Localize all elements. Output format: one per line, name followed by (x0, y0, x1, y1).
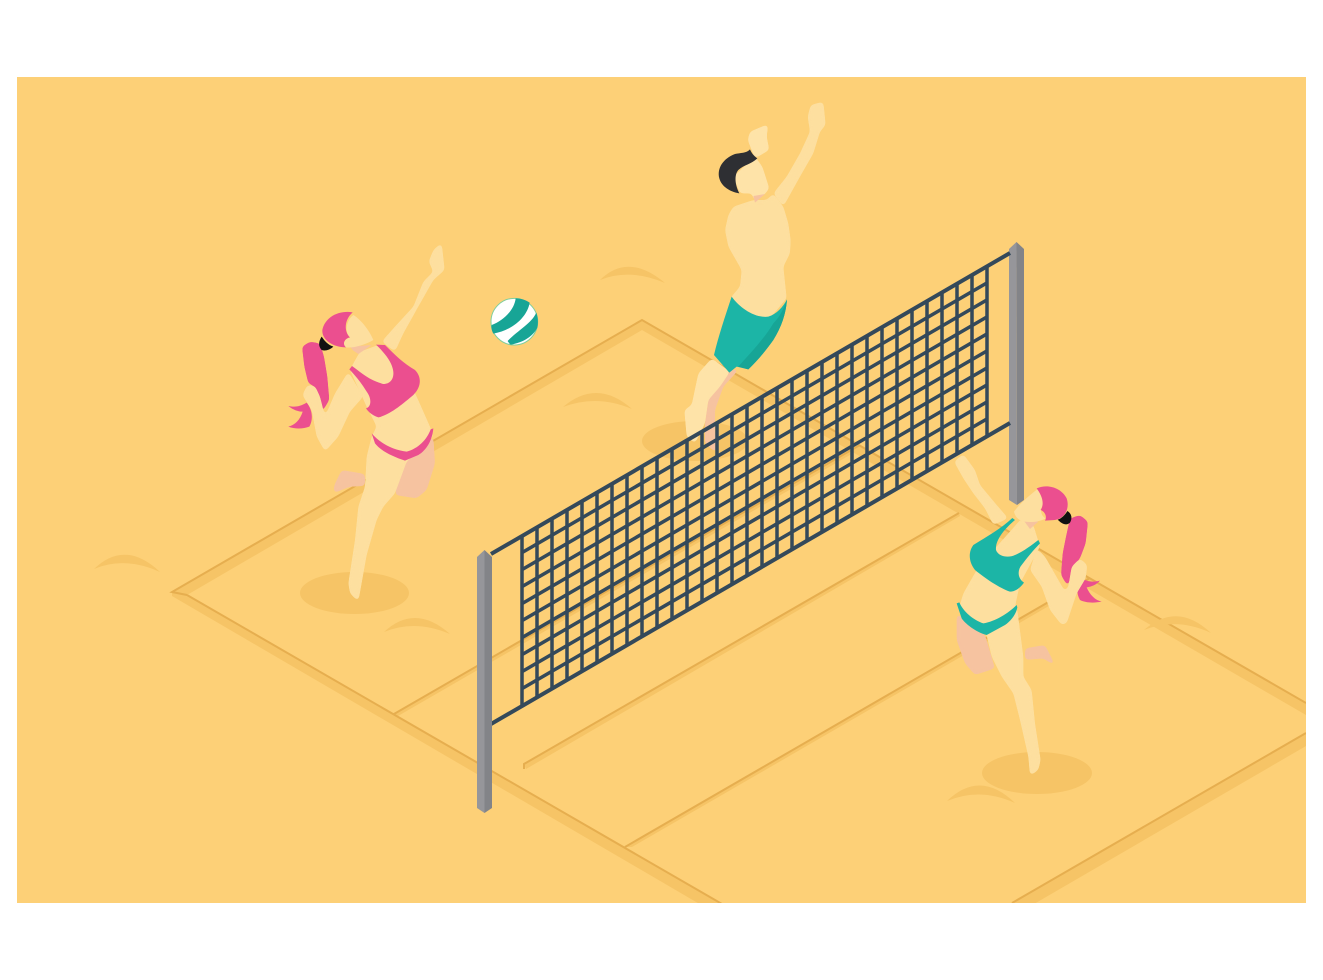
ponytail (302, 342, 329, 413)
left net post (477, 550, 492, 813)
volleyball net (491, 253, 1010, 724)
court line shadows (172, 320, 1306, 906)
hair cap (1037, 486, 1068, 521)
hair (719, 149, 757, 193)
ball stripes (491, 298, 538, 345)
face (344, 315, 373, 348)
ponytail tip (288, 403, 312, 429)
player: left woman in pink (288, 243, 445, 602)
mound (600, 267, 665, 283)
bikini bottom (372, 428, 433, 461)
bikini bottom (957, 602, 1017, 635)
shadow: left player (300, 572, 409, 614)
mound (563, 393, 632, 409)
shorts shade (738, 299, 787, 369)
raised arm (954, 454, 1008, 525)
front leg (684, 358, 730, 443)
sand mounds (94, 267, 1211, 803)
torso (725, 193, 791, 320)
player: right woman in teal (954, 454, 1102, 776)
net mesh verticals (522, 266, 987, 706)
net cords (491, 253, 1010, 724)
neck (1023, 520, 1038, 529)
ponytail (1061, 515, 1088, 587)
bent arm (1030, 548, 1087, 625)
raised arm (382, 243, 445, 352)
court markings (172, 320, 1306, 906)
mound (384, 618, 450, 634)
neck (753, 194, 765, 203)
bent arm (302, 372, 363, 452)
torso and front leg (348, 345, 433, 602)
hair tie (1058, 511, 1071, 524)
bikini top (970, 518, 1040, 592)
head (733, 157, 769, 202)
shorts (714, 297, 787, 373)
hair cap (322, 312, 353, 347)
back leg (333, 437, 435, 498)
mound (947, 785, 1015, 803)
net mesh horizontals (522, 283, 987, 689)
mound (94, 555, 160, 572)
bikini top (349, 345, 420, 417)
back leg (705, 368, 740, 453)
ponytail tip (1077, 578, 1102, 603)
raised arm (773, 102, 826, 207)
volleyball (491, 298, 538, 345)
torso and front leg (958, 518, 1041, 776)
other hand (748, 124, 769, 158)
face (1014, 489, 1046, 522)
back leg (957, 613, 1056, 675)
court line strokes (172, 320, 1306, 904)
neck (350, 345, 372, 354)
right net post (1009, 242, 1024, 505)
hair tie (319, 337, 333, 351)
shadow: center player (642, 421, 748, 461)
mound (1144, 616, 1211, 633)
shadow: right player (982, 752, 1092, 794)
player: center man in teal shorts (684, 102, 826, 453)
